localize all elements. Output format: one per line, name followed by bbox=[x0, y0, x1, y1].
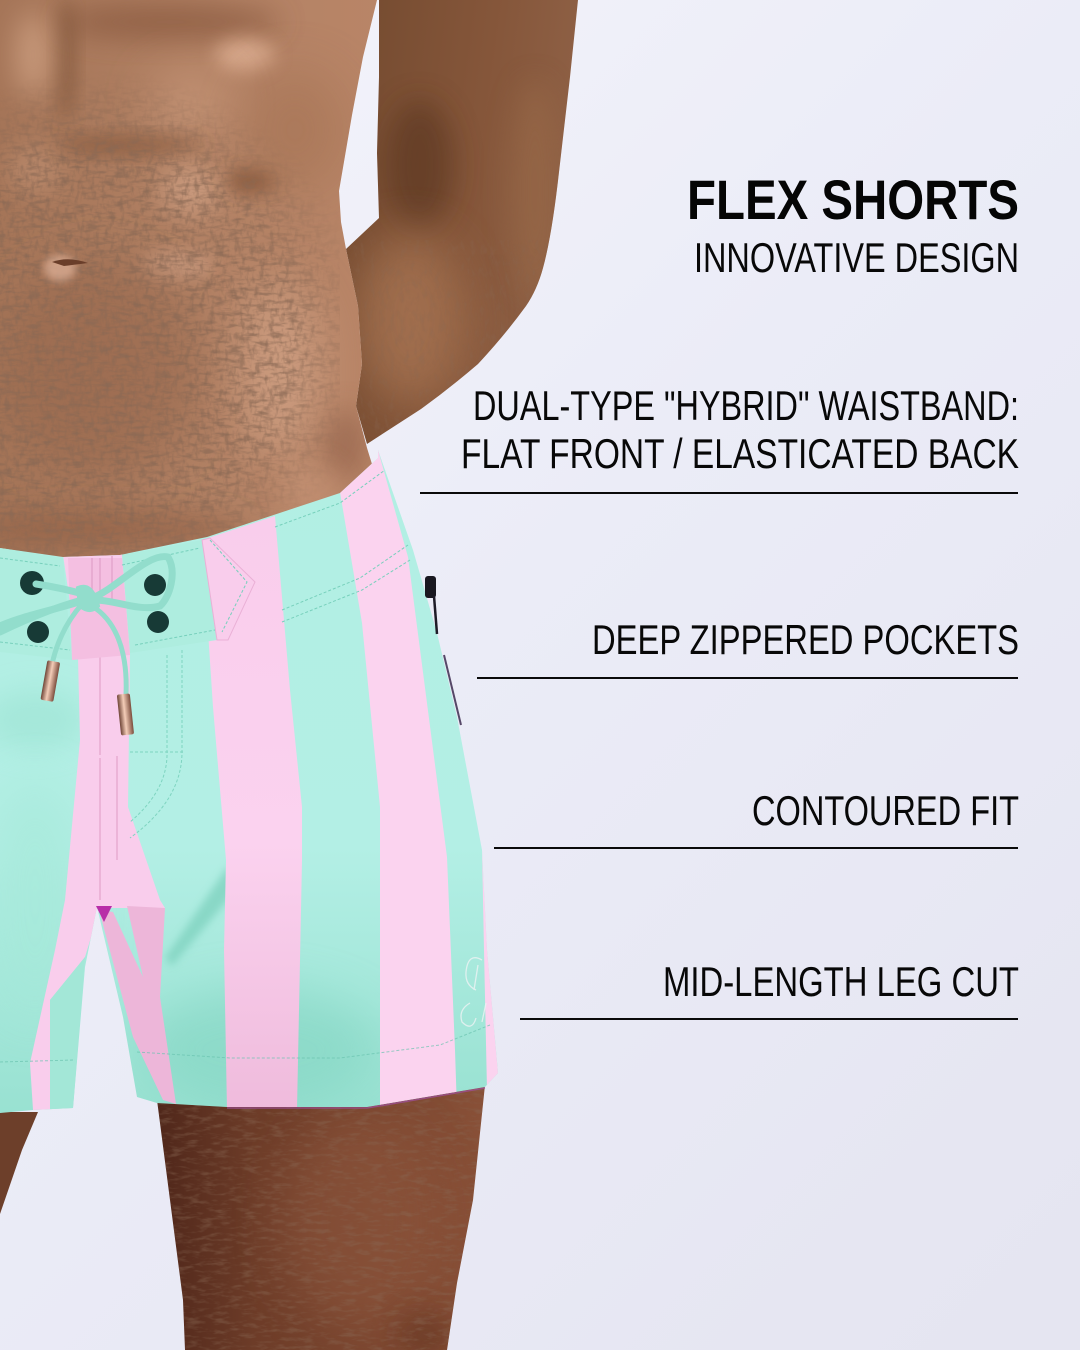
pocket stitching bbox=[130, 650, 183, 838]
waistband flaps bbox=[0, 470, 410, 660]
title: FLEX SHORTS bbox=[687, 168, 1019, 231]
arm behind back bbox=[340, 0, 585, 450]
hem stitching bbox=[137, 1025, 490, 1058]
shorts bbox=[0, 440, 510, 1120]
eyelets bbox=[20, 571, 169, 643]
side zipper pull bbox=[425, 576, 461, 725]
drawstring with bow bbox=[0, 557, 172, 695]
crotch accent bbox=[96, 906, 112, 922]
fly seam bbox=[100, 650, 117, 900]
thigh right bbox=[150, 1085, 495, 1350]
small logo mark bbox=[461, 958, 486, 1026]
feature: waistband bbox=[420, 382, 1019, 494]
thigh left bbox=[0, 1112, 38, 1214]
pink stripe 3 bbox=[340, 450, 457, 1110]
hem shadow bbox=[227, 1088, 485, 1108]
side pink edge bbox=[482, 854, 498, 1085]
mint base bbox=[0, 440, 510, 1120]
mint shading bbox=[0, 694, 76, 746]
bare torso bbox=[0, 0, 385, 570]
photo: model wearing striped shorts bbox=[0, 0, 585, 1350]
left-leg mint wedge bbox=[50, 957, 85, 1110]
pink stripe 2 bbox=[202, 516, 302, 1110]
pink stripe centre and left leg bbox=[30, 553, 165, 1110]
aglets bbox=[40, 660, 134, 736]
right-leg pink gusset bbox=[99, 906, 176, 1104]
navel bbox=[44, 255, 88, 281]
